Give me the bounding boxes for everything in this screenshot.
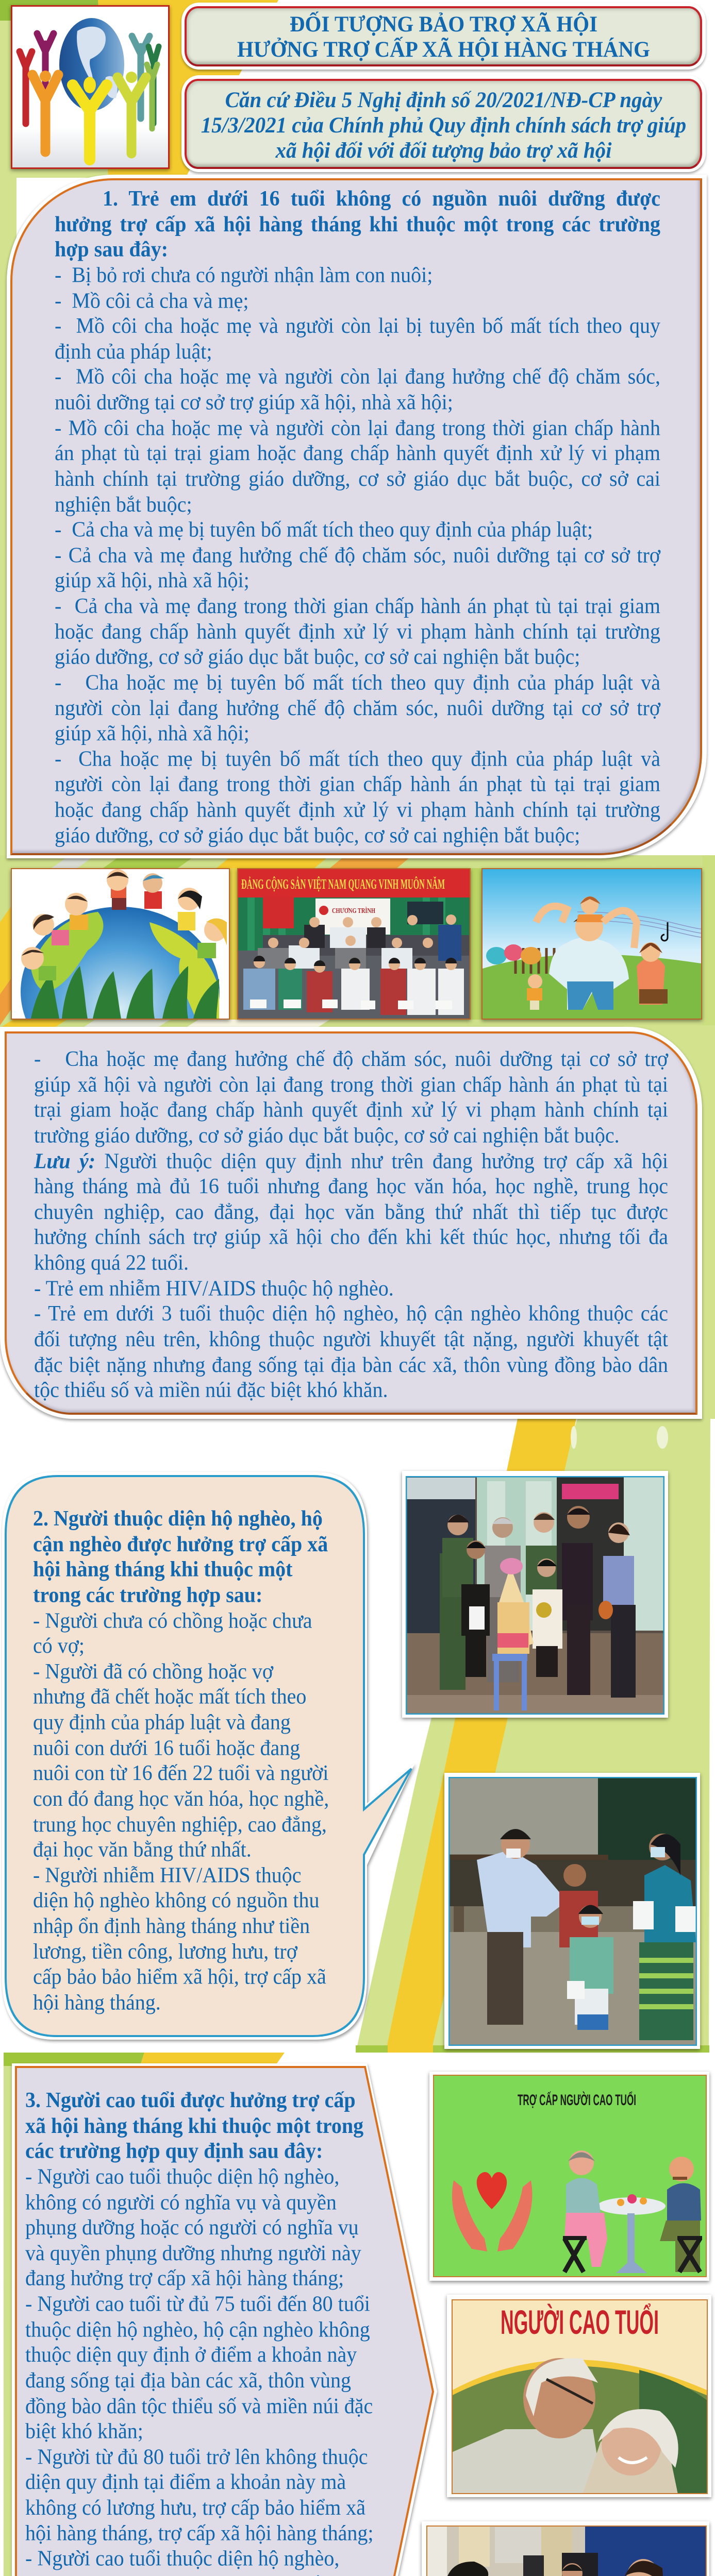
section 2 list: có vợ; bbox=[33, 1633, 85, 1658]
section 3 list: phụng dưỡng hoặc có người có nghĩa vụ bbox=[25, 2215, 359, 2240]
section 1 list: án phạt tù tại trại giam hoặc đang chấp hành quyết định xử lý vi phạm bbox=[55, 440, 660, 465]
section 3 list: không có người có nghĩa vụ và quyền bbox=[25, 2190, 337, 2214]
section 3 list: - Người từ đủ 80 tuổi trở lên không thuộc bbox=[25, 2444, 368, 2469]
section 1 continued text: trại giam hoặc đang chấp hành quyết định xử lý vi phạm hành chính tại bbox=[34, 1097, 668, 1122]
section 1 list: hoặc đang chấp hành quyết định xử lý vi phạm hành chính tại trường bbox=[55, 797, 660, 822]
section 1 continued text: không quá 22 tuổi. bbox=[34, 1250, 189, 1275]
section 2 heading bbox=[33, 1506, 328, 1607]
section 1 list: giáo dưỡng, cơ sở giáo dục bắt buộc, cơ sở cai nghiện bắt buộc; bbox=[55, 823, 580, 847]
section 2 list bbox=[33, 1608, 329, 2014]
arrow shape bbox=[10, 2063, 439, 2576]
section 1 list: định của pháp luật; bbox=[55, 339, 212, 363]
title text: HƯỞNG TRỢ CẤP XÃ HỘI HÀNG THÁNG bbox=[237, 37, 650, 61]
section 3 list: hội hàng tháng, trợ cấp xã hội hàng tháng; bbox=[25, 2520, 373, 2545]
section 1 list: - Mồ côi cha hoặc mẹ và người còn lại đang trong thời gian chấp hành bbox=[55, 415, 660, 440]
section 1 list: - Mồ côi cả cha và mẹ; bbox=[55, 288, 249, 312]
section 3 list: biệt khó khăn; bbox=[25, 2418, 143, 2443]
section 1 list: - Cha hoặc mẹ bị tuyên bố mất tích theo quy định của pháp luật và bbox=[55, 670, 660, 694]
section 1 list: nuôi dưỡng tại cơ sở trợ giúp xã hội, nhà xã hội; bbox=[55, 389, 453, 414]
section 3 list: - Người cao tuổi thuộc diện hộ nghèo, bbox=[25, 2164, 339, 2189]
section 2 heading: 2. Người thuộc diện hộ nghèo, hộ bbox=[33, 1506, 323, 1531]
section 1 continued text: đặc biệt nặng nhưng đang sống tại địa bàn các xã, thôn vùng đồng bào dân bbox=[34, 1352, 668, 1376]
section 1 list: - Cả cha và mẹ đang hưởng chế độ chăm sóc, nuôi dưỡng tại cơ sở trợ bbox=[55, 543, 660, 567]
section 1 heading: 1. Trẻ em dưới 16 tuổi không có nguồn nuôi dưỡng được bbox=[103, 186, 660, 211]
title box bbox=[181, 3, 706, 70]
section 2 heading: trong các trường hợp sau: bbox=[33, 1582, 262, 1607]
section 3 list: - Người cao tuổi từ đủ 75 tuổi đến 80 tuổi bbox=[25, 2291, 370, 2316]
section 3 list: diện quy định tại điểm a khoản này mà bbox=[25, 2469, 346, 2494]
section 1 list: hành chính tại trường giáo dưỡng, cơ sở giáo dục bắt buộc, cơ sở cai bbox=[55, 466, 660, 490]
section 3 list: đang hưởng trợ cấp xã hội hàng tháng; bbox=[25, 2266, 344, 2291]
image: family cartoon bbox=[481, 868, 702, 1020]
section 1 continued text: giúp xã hội và người còn lại đang trong thời gian chấp hành án phạt tù tại bbox=[34, 1072, 668, 1096]
section 3 list: đồng bào dân tộc thiểu số và miền núi đặc bbox=[25, 2393, 373, 2418]
section 1 list: giáo dưỡng, cơ sở giáo dục bắt buộc, cơ sở cai nghiện bắt buộc; bbox=[55, 645, 580, 669]
image: children on globe bbox=[11, 868, 230, 1020]
section 1 list: nghiện bắt buộc; bbox=[55, 492, 192, 516]
section 2 list: nuôi con dưới 16 tuổi hoặc đang bbox=[33, 1735, 300, 1760]
section 3 heading: 3. Người cao tuổi được hưởng trợ cấp bbox=[25, 2088, 356, 2112]
subtitle text: xã hội đối với đối tượng bảo trợ xã hội bbox=[275, 138, 612, 162]
section 3 list: và quyền phụng dưỡng nhưng người này bbox=[25, 2241, 361, 2265]
section 1 list: giúp xã hội, nhà xã hội; bbox=[55, 721, 250, 745]
section 1 continued text: - Trẻ em dưới 3 tuổi thuộc diện hộ nghèo, hộ cận nghèo không thuộc các bbox=[34, 1301, 668, 1325]
subtitle text: 15/3/2021 của Chính phủ Quy định chính sách trợ giúp bbox=[201, 112, 686, 137]
section 2 list: nhưng đã chết hoặc mất tích theo bbox=[33, 1684, 306, 1709]
photo: soldiers visiting a family bbox=[402, 1471, 668, 1718]
section 3 list: thuộc diện hộ nghèo, hộ cận nghèo không bbox=[25, 2317, 370, 2342]
image: elderly allowance illustration bbox=[429, 2072, 709, 2281]
section 1 list: - Mồ côi cha hoặc mẹ và người còn lại bị tuyên bố mất tích theo quy bbox=[55, 313, 660, 338]
section 2 list: đại học văn bằng thứ nhất. bbox=[33, 1837, 252, 1861]
section 1 list: - Bị bỏ rơi chưa có người nhận làm con nuôi; bbox=[55, 262, 433, 287]
section 2 list: - Người nhiễm HIV/AIDS thuộc bbox=[33, 1862, 302, 1887]
section 2 text bbox=[33, 1506, 329, 2014]
panel: section 2 poor households callout bbox=[1, 1471, 417, 2043]
section 1 heading bbox=[55, 186, 660, 262]
section 2 heading: hội hàng tháng khi thuộc một bbox=[33, 1557, 292, 1582]
section 1 continued text: chuyên nghiệp, cao đẳng, đại học văn bằng thứ nhất thì tiếp tục được bbox=[34, 1199, 668, 1224]
callout shape bbox=[1, 1471, 417, 2043]
section 1 list: - Cả cha và mẹ bị tuyên bố mất tích theo quy định của pháp luật; bbox=[55, 517, 593, 541]
section 1 continued text: - Cha hoặc mẹ đang hưởng chế độ chăm sóc, nuôi dưỡng tại cơ sở trợ bbox=[34, 1046, 668, 1071]
photo: allowance payment desk bbox=[422, 2521, 709, 2576]
section 2 list: - Người chưa có chồng hoặc chưa bbox=[33, 1608, 312, 1632]
section 2 list: quy định của pháp luật và đang bbox=[33, 1709, 291, 1734]
section 1 list: - Mồ côi cha hoặc mẹ và người còn lại đang hưởng chế độ chăm sóc, bbox=[55, 364, 660, 389]
section 2 list: cấp bảo bảo hiểm xã hội, trợ cấp xã bbox=[33, 1964, 326, 1989]
section 3 list: thuộc diện quy định ở điểm a khoản này bbox=[25, 2342, 357, 2367]
section 1 heading: hưởng trợ cấp xã hội hàng tháng khi thuộc một trong các trường bbox=[55, 211, 660, 236]
title text bbox=[237, 11, 650, 61]
image: the elderly couple poster bbox=[447, 2295, 711, 2497]
section 1 continued text: đối tượng nêu trên, không thuộc người khuyết tật nặng, người khuyết tật bbox=[34, 1326, 668, 1351]
section 1 continued text: trường giáo dưỡng, cơ sở giáo dục bắt buộc, cơ sở cai nghiện bắt buộc. bbox=[34, 1123, 620, 1147]
panel: section 1 continued and note bbox=[0, 1027, 702, 1419]
section 1 list: hoặc đang chấp hành quyết định xử lý vi phạm hành chính tại trường bbox=[55, 619, 660, 643]
photo: official handing envelope to child bbox=[444, 1773, 700, 2049]
section 2 list: trung học chuyên nghiệp, cao đẳng, bbox=[33, 1811, 327, 1836]
section 1 continued text: hưởng chính sách trợ giúp xã hội cho đến khi kết thúc học, nhưng tối đa bbox=[34, 1224, 668, 1249]
section 3 heading bbox=[25, 2088, 363, 2163]
section 3 list bbox=[25, 2164, 373, 2576]
section 1 list: giúp xã hội, nhà xã hội; bbox=[55, 568, 250, 592]
section 2 list: nhập ổn định hàng tháng như tiền bbox=[33, 1913, 310, 1938]
section 3 list: đang sống tại địa bàn các xã, thôn vùng bbox=[25, 2368, 351, 2392]
section 3 heading: các trường hợp quy định sau đây: bbox=[25, 2139, 323, 2163]
section 2 list: nuôi con từ 16 đến 22 tuổi và người bbox=[33, 1760, 328, 1785]
section 1 continued text: hàng tháng mà đủ 16 tuổi nhưng đang học văn hóa, học nghề, trung học bbox=[34, 1174, 668, 1198]
section 1 text bbox=[55, 186, 661, 847]
image: group photo of children with banner bbox=[237, 868, 471, 1020]
section 1 list: người còn lại đang hưởng chế độ chăm sóc, nuôi dưỡng tại cơ sở trợ bbox=[55, 695, 660, 720]
section 2 list: hội hàng tháng. bbox=[33, 1990, 161, 2014]
section 1 list: - Cả cha và mẹ đang trong thời gian chấp hành án phạt tù tại trại giam bbox=[55, 594, 660, 618]
subtitle text bbox=[201, 87, 686, 163]
subtitle text: Căn cứ Điều 5 Nghị định số 20/2021/NĐ-CP ngày bbox=[225, 87, 662, 112]
title text: ĐỐI TƯỢNG BẢO TRỢ XÃ HỘI bbox=[290, 11, 597, 36]
panel: section 3 elderly arrow bbox=[10, 2063, 439, 2576]
image: globe with coloured people bbox=[11, 5, 170, 169]
section 1 continued text: Lưu ý: Người thuộc diện quy định như trên đang hưởng trợ cấp xã hội bbox=[34, 1148, 668, 1173]
section 1 list bbox=[55, 262, 661, 847]
section 1 continued text: tộc thiểu số và miền núi đặc biệt khó khăn. bbox=[34, 1377, 388, 1402]
image: group photo of children with banner: CHƯƠNG TRÌNH bbox=[332, 906, 375, 915]
section 1 continued text: - Trẻ em nhiễm HIV/AIDS thuộc hộ nghèo. bbox=[34, 1275, 394, 1300]
section 2 list: lương, tiền công, lương hưu, trợ bbox=[33, 1939, 297, 1963]
section 1 list: - Cha hoặc mẹ bị tuyên bố mất tích theo quy định của pháp luật và bbox=[55, 746, 660, 771]
subtitle box: legal basis bbox=[181, 75, 706, 172]
section 3 list: không có lương hưu, trợ cấp bảo hiểm xã bbox=[25, 2495, 365, 2519]
section 2 heading: cận nghèo được hưởng trợ cấp xã bbox=[33, 1531, 328, 1556]
section 3 list: - Người cao tuổi thuộc diện hộ nghèo, bbox=[25, 2546, 339, 2570]
section 2 list: con đó đang học văn hóa, học nghề, bbox=[33, 1786, 329, 1810]
section 1 heading: hợp sau đây: bbox=[55, 237, 168, 262]
section 2 list: diện hộ nghèo không có nguồn thu bbox=[33, 1888, 320, 1912]
section 3 heading: xã hội hàng tháng khi thuộc một trong bbox=[25, 2113, 363, 2138]
section 3 text bbox=[25, 2088, 373, 2576]
section 1 continued text bbox=[34, 1046, 668, 1402]
section 2 list: - Người đã có chồng hoặc vợ bbox=[33, 1659, 273, 1683]
panel: section 1 children under 16 bbox=[7, 175, 707, 858]
section 1 list: người còn lại đang trong thời gian chấp hành án phạt tù tại trại giam bbox=[55, 772, 660, 796]
